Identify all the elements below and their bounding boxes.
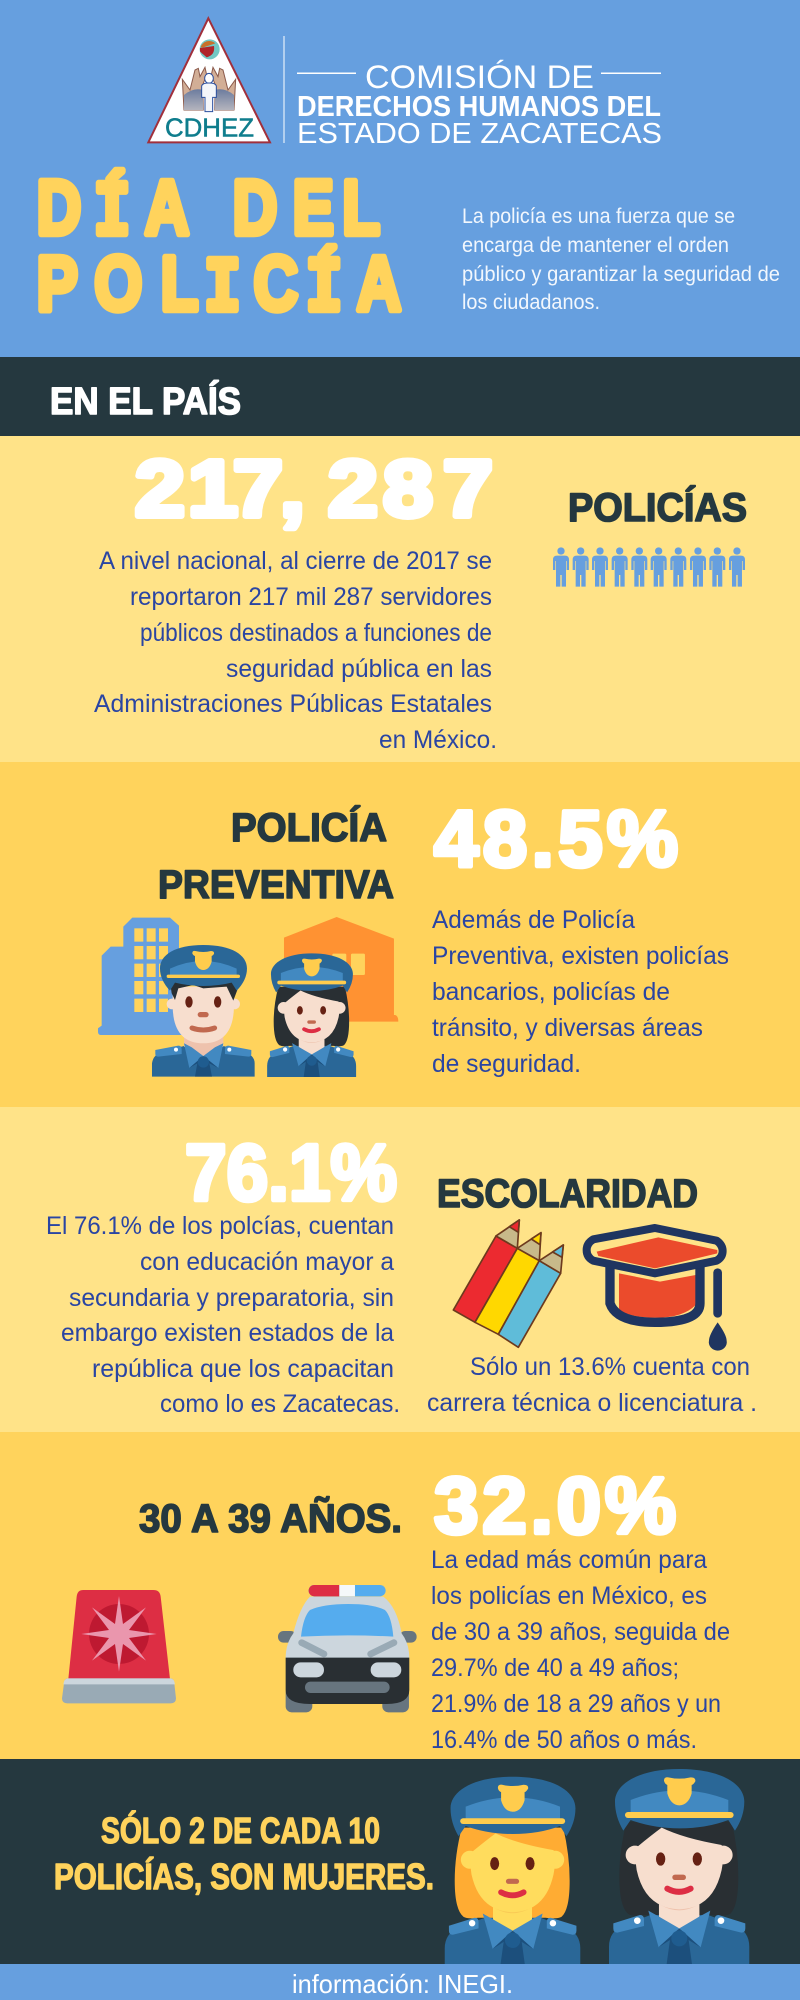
icon: pencils [453,1220,563,1347]
heading: POLICÍA [231,805,387,850]
intro text: los ciudadanos. [462,291,600,314]
intro text: público y garantizar la seguridad de [462,263,780,286]
icon: female officer [267,953,356,1077]
body text: 16.4% de 50 años o más. [431,1726,697,1754]
title: P [37,240,78,327]
title: D [37,164,81,251]
body text: de seguridad. [432,1050,581,1078]
body text: Preventiva, existen policías [432,942,729,970]
icon: blonde officer [445,1777,580,1965]
icon: office building [98,918,183,1035]
big number: 76.1% [185,1128,397,1217]
body text: Administraciones Públicas Estatales [94,690,492,718]
organization name: DERECHOS HUMANOS DEL [297,91,661,123]
panel: total police [0,436,800,762]
title: Í [94,169,131,257]
body text: A nivel nacional, al cierre de 2017 se [99,547,492,575]
big number: 217, 287 [135,443,493,533]
callout text [54,1809,434,1897]
title: L [342,164,380,251]
illustration: officers and buildings [98,917,398,1077]
panel: header [0,0,800,357]
body text [427,1353,757,1417]
body text: 29.7% de 40 a 49 años; [431,1654,679,1682]
title: L [161,240,198,327]
organization name: ESTADO DE ZACATECAS [297,118,662,150]
body text: con educación mayor a [140,1248,394,1276]
body text: embargo existen estados de la [61,1319,394,1347]
intro text: La policía es una fuerza que se [462,205,735,228]
heading: ESCOLARIDAD [437,1172,698,1216]
body text: Además de Policía [432,906,635,934]
body text: bancarios, policías de [432,978,670,1006]
body text [94,547,497,754]
body text: 21.9% de 18 a 29 años y un [431,1690,721,1718]
icon: warehouse [284,917,398,1022]
title: Í [306,245,343,333]
callout text: POLICÍAS, SON MUJERES. [54,1856,434,1897]
big number: 32.0% [434,1461,676,1550]
body text: como lo es Zacatecas. [160,1390,400,1418]
icon: siren [62,1590,176,1703]
divider [284,36,285,143]
intro text: encarga de mantener el orden [462,234,729,257]
panel: source footer [0,1964,800,2000]
body text: en México. [379,726,497,754]
logo CDHEZ: CDHEZ [165,113,254,143]
body text [432,906,729,1078]
body text: seguridad pública en las [226,655,492,683]
title: O [94,240,142,327]
panel: edad [0,1432,800,1759]
panel: women officers [0,1759,800,1965]
icon: dark-haired officer [609,1769,749,1964]
illustration: two female officers [445,1769,749,1965]
body text: Sólo un 13.6% cuenta con [470,1353,750,1381]
icon: row of people [553,547,745,587]
body text: públicos destinados a funciones de [140,619,492,647]
panel: policía preventiva [0,762,800,1107]
body text: reportaron 217 mil 287 servidores [130,583,492,611]
body text: república que los capacitan [92,1355,394,1383]
panel: escolaridad [0,1107,800,1432]
heading: PREVENTIVA [158,863,394,907]
big number: 48.5% [434,794,678,883]
title: C [254,240,298,327]
organization name [297,59,662,150]
heading [158,805,394,907]
illustration: pencils and graduation cap [453,1220,727,1351]
icon: male officer [152,945,255,1077]
title: D [233,164,277,251]
title: A [357,240,401,327]
body text [46,1212,400,1418]
icon: graduation cap [587,1228,727,1351]
organization name: COMISIÓN DE [365,59,594,95]
body text: tránsito, y diversas áreas [432,1014,703,1042]
illustration: siren and police car [62,1585,417,1712]
heading: POLICÍAS [568,485,747,530]
source text: información: INEGI. [292,1969,513,1999]
body text: secundaria y preparatoria, sin [69,1284,394,1312]
icon: police car [278,1585,417,1712]
heading: EN EL PAÍS [50,379,241,423]
panel: en el país band [0,357,800,436]
heading: 30 A 39 AÑOS. [139,1495,402,1541]
callout text: SÓLO 2 DE CADA 10 [101,1809,380,1851]
intro text [462,205,780,314]
body text: La edad más común para [431,1546,707,1574]
title: E [293,164,334,251]
title [37,164,401,333]
body text: El 76.1% de los polcías, cuentan [46,1212,394,1240]
body text [431,1546,730,1754]
body text: los policías en México, es [431,1582,707,1610]
logo CDHEZ [148,18,270,143]
title: A [145,164,189,251]
title: I [204,246,241,333]
body text: de 30 a 39 años, seguida de [431,1618,730,1646]
body text: carrera técnica o licenciatura . [427,1389,757,1417]
